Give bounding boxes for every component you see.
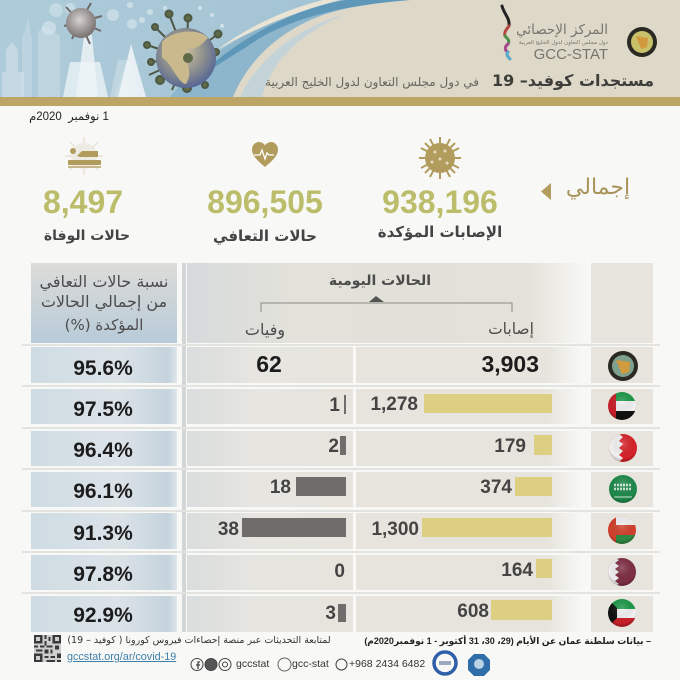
icon: certification badge xyxy=(432,650,458,676)
flag: Bahrain xyxy=(609,434,637,462)
icon: heart xyxy=(252,142,278,167)
row: Qatar: 97.8% xyxy=(73,563,133,586)
row: GCC: 95.6% xyxy=(73,357,133,380)
total recovered: حالات التعافي xyxy=(213,227,317,245)
arrow xyxy=(541,183,551,200)
table header: daily cases: وفيات xyxy=(245,320,285,339)
grey virus illustration xyxy=(64,3,102,44)
total confirmed: 938,196 xyxy=(382,184,498,220)
table header: recovery ratio: نسبة حالات التعافي xyxy=(40,272,168,291)
logo text: المركز الإحصائي xyxy=(516,22,608,38)
icon: virus xyxy=(419,137,461,179)
row: Qatar: 164 xyxy=(501,560,533,581)
row: Qatar: 0 xyxy=(334,561,345,582)
row: Oman: 38 xyxy=(218,519,239,540)
total heading: إجمالي xyxy=(566,175,630,200)
flags column xyxy=(608,351,638,627)
bracket xyxy=(260,296,512,312)
row: Kuwait: 3 xyxy=(325,603,336,624)
flag: Kuwait xyxy=(608,599,636,627)
table header: daily cases: إصابات xyxy=(488,320,534,338)
total recovered xyxy=(207,184,323,245)
icon: patient on bed xyxy=(65,137,103,175)
social media handles xyxy=(190,658,425,672)
footnote: – بيانات سلطنة عمان عن الأيام (29، 30، 31 أكتوبر - 1 نوفمبر2020م) xyxy=(364,636,651,646)
total deaths xyxy=(43,184,130,244)
total confirmed xyxy=(378,184,502,241)
row: Kuwait: 92.9% xyxy=(73,604,133,627)
row: Saudi Arabia xyxy=(31,472,653,507)
total deaths: 8,497 xyxy=(43,184,123,220)
row separators xyxy=(22,344,660,346)
title: مستجدات كوفيد– 19 xyxy=(492,71,654,90)
row: Kuwait xyxy=(31,596,653,632)
table header: daily cases: الحالات اليومية xyxy=(329,273,431,289)
flag: Saudi Arabia xyxy=(609,475,637,503)
city skyline xyxy=(2,2,224,97)
table divider xyxy=(182,263,186,632)
row: UAE xyxy=(31,389,653,424)
beige area and swooshes xyxy=(170,0,680,97)
row: Oman: 1,300 xyxy=(371,519,419,540)
subtitle: في دول مجلس التعاون لدول الخليج العربية xyxy=(265,75,479,89)
social media handles: gccstat xyxy=(236,658,269,670)
GCC-Stat ribbon logo xyxy=(502,6,510,59)
flag: UAE xyxy=(608,392,636,420)
social media handles: +968 2434 6482 xyxy=(349,658,425,670)
total recovered: 896,505 xyxy=(207,184,323,220)
table header: daily cases xyxy=(187,263,587,343)
row: UAE: 1 xyxy=(329,395,340,416)
table header: recovery ratio: المؤكدة (%) xyxy=(65,316,143,334)
total deaths: حالات الوفاة xyxy=(44,228,130,244)
total confirmed: الإصابات المؤكدة xyxy=(378,223,502,241)
follow text: لمتابعة التحديثات عبر منصة إحصاءات فيروس كورونا ( كوفيد – 19) xyxy=(67,635,331,646)
row: Saudi Arabia: 374 xyxy=(480,477,512,498)
link: gccstat.org/ar/covid-19 xyxy=(67,651,176,663)
logo text: دول مجلس التعاون لدول الخليج العربية xyxy=(519,40,608,46)
header GCC emblem xyxy=(627,27,657,57)
row: Bahrain: 96.4% xyxy=(73,439,133,462)
row: Oman: 91.3% xyxy=(73,522,133,545)
logo text: GCC-STAT xyxy=(534,46,608,63)
logo text xyxy=(516,22,608,63)
row: GCC: 3,903 xyxy=(481,351,539,377)
row: UAE: 1,278 xyxy=(370,394,418,415)
row: UAE: 97.5% xyxy=(73,398,133,421)
gold band xyxy=(0,97,680,106)
row: GCC xyxy=(31,347,653,383)
flag: GCC xyxy=(608,351,638,381)
icon: TUV badge xyxy=(468,654,490,676)
date: 1 نوفمبر 2020م xyxy=(29,111,109,123)
header banner xyxy=(0,0,680,106)
row: Bahrain xyxy=(31,431,653,466)
globe with virus spikes xyxy=(144,10,222,92)
row: Kuwait: 608 xyxy=(457,601,489,622)
row: GCC: 62 xyxy=(256,351,282,377)
table header: recovery ratio: من إجمالي الحالات xyxy=(41,292,167,311)
social media handles: gcc-stat xyxy=(292,658,329,670)
flag: Oman xyxy=(608,516,636,544)
table header: recovery ratio xyxy=(31,263,177,343)
row: Oman xyxy=(31,513,653,549)
table header: flag column xyxy=(591,263,653,343)
row: Saudi Arabia: 96.1% xyxy=(73,480,133,503)
row: Saudi Arabia: 18 xyxy=(270,477,291,498)
row: Qatar xyxy=(31,555,653,590)
row: Bahrain: 2 xyxy=(328,436,339,457)
flag: Qatar xyxy=(608,558,636,586)
row: Bahrain: 179 xyxy=(494,436,526,457)
icon: QR code xyxy=(34,635,61,662)
